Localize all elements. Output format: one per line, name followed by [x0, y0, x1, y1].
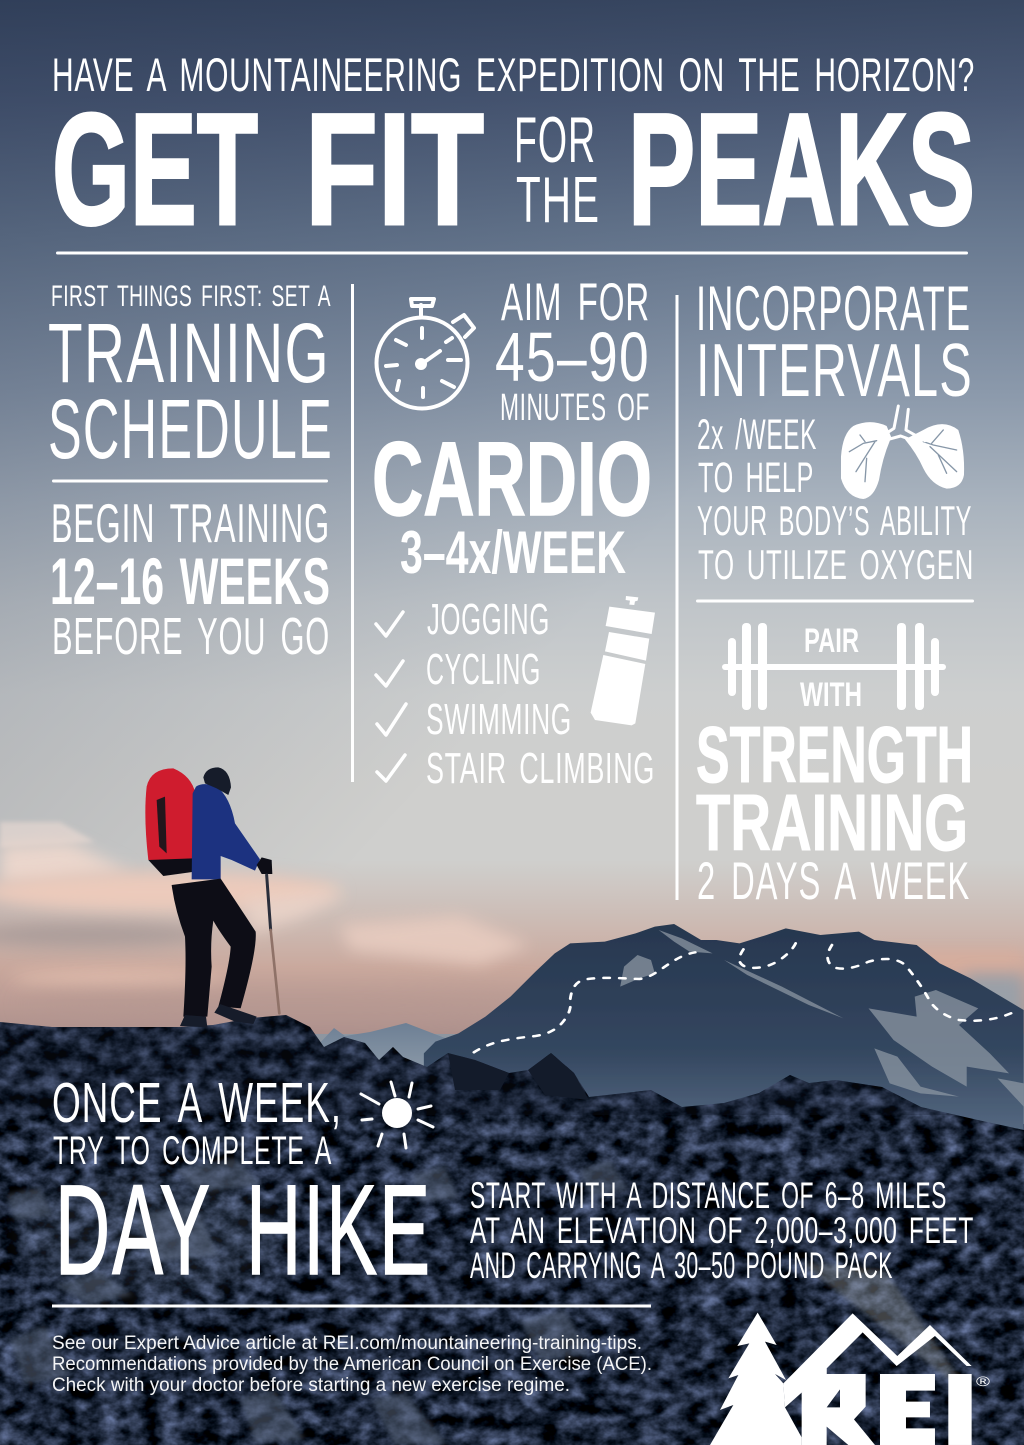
trekking pole: [267, 875, 279, 1013]
letter I: [948, 1374, 972, 1445]
glove: [257, 857, 272, 874]
12-16 weeks: 12–16 WEEKS: [50, 544, 330, 618]
foreground rocks: [0, 1000, 1024, 1445]
icon: sun: [361, 1082, 433, 1148]
try to complete a: TRY TO COMPLETE A: [53, 1129, 332, 1173]
logo: REI: [710, 1313, 991, 1445]
letter E: [880, 1374, 935, 1445]
background: dusk sky: [0, 0, 1024, 1124]
pair: PAIR: [804, 622, 859, 660]
icon: check marks: [376, 612, 406, 781]
main mountain: [424, 924, 1024, 1150]
fog behind right slope: [965, 975, 1024, 1025]
item: cycling: CYCLING: [426, 645, 541, 694]
icon: lungs: [841, 406, 964, 499]
panel: intervals: [696, 274, 974, 911]
panel: day hike: [52, 1071, 974, 1302]
minutes of: MINUTES OF: [500, 387, 650, 429]
icon: barbell: [722, 623, 946, 710]
dashed trail on mountain: [474, 938, 1015, 1052]
item: stair climbing: STAIR CLIMBING: [426, 744, 655, 793]
heading: cardio: CARDIO: [372, 421, 652, 538]
trousers: [172, 879, 256, 1017]
title: get: GET: [52, 80, 258, 258]
registered mark: ®: [976, 1373, 991, 1389]
mountain outline: [783, 1313, 972, 1407]
hiker: [145, 767, 279, 1027]
boots: [180, 1004, 257, 1027]
2x week: 2x /WEEK: [697, 411, 817, 459]
frequency: 3–4x/WEEK: [400, 519, 626, 586]
heading: schedule: SCHEDULE: [48, 382, 333, 476]
head and hat: [203, 767, 231, 795]
lead-in: FIRST THINGS FIRST: SET A: [51, 280, 331, 313]
lighter boulders: [6, 1158, 628, 1445]
footer line 1: See our Expert Advice article at REI.com/mountaineering-training-tips.: [52, 1333, 642, 1354]
to help: TO HELP: [698, 454, 814, 502]
aim for: AIM FOR: [501, 273, 650, 332]
with: WITH: [800, 676, 862, 714]
title: for: FOR: [514, 103, 596, 176]
panel: training schedule: [48, 280, 333, 666]
45-90: 45–90: [495, 318, 650, 396]
checklist: [376, 595, 655, 793]
icon: red backpack: [145, 768, 195, 876]
panel: cardio: [372, 273, 655, 793]
icon: water bottle: [591, 596, 655, 725]
heading: training: TRAINING: [48, 306, 330, 400]
before you go: BEFORE YOU GO: [52, 608, 330, 666]
footer line 3: Check with your doctor before starting a new exercise regime.: [52, 1375, 570, 1396]
blue jacket: [192, 784, 260, 879]
once a week: ONCE A WEEK,: [52, 1071, 342, 1135]
item: swimming: SWIMMING: [426, 695, 572, 744]
header: [52, 48, 975, 258]
icon: stopwatch: [376, 299, 474, 408]
footer note: [52, 1333, 652, 1396]
footer line 2: Recommendations provided by the American Council on Exercise (ACE).: [52, 1354, 652, 1375]
begin training: BEGIN TRAINING: [51, 492, 330, 554]
title: fit: FIT: [305, 80, 484, 258]
distant hazy mountains: [318, 1023, 445, 1085]
heading: day hike: DAY HIKE: [55, 1159, 432, 1302]
title: the: THE: [516, 163, 600, 236]
item: jogging: JOGGING: [427, 595, 550, 644]
snow patches: [620, 930, 1024, 1107]
tree: [710, 1313, 802, 1445]
letter R: [802, 1368, 875, 1445]
pink clouds: [0, 822, 1024, 1021]
